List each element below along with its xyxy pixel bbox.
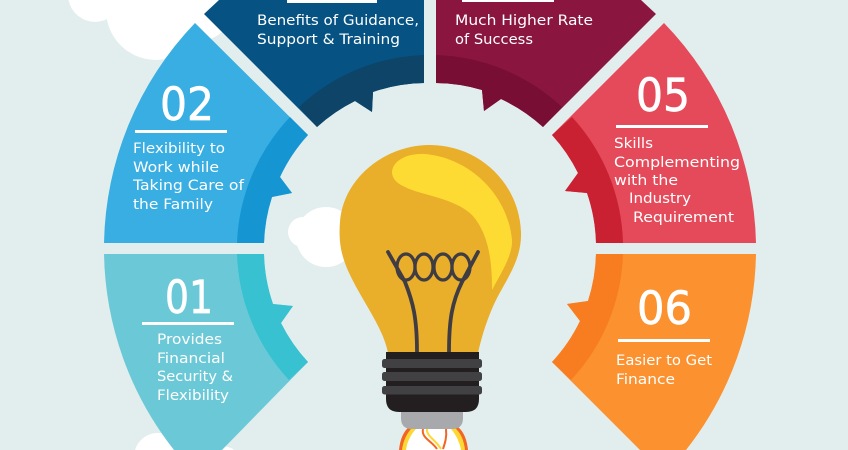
rule: 03 [287, 0, 377, 3]
icon: light bulb [340, 145, 521, 450]
band: 06 inner [552, 254, 623, 380]
panel: 06 easier finance [552, 254, 756, 450]
text: 05 description: Complementing [614, 155, 740, 171]
text: 05 description: with the [614, 173, 678, 189]
text: 06 description: Finance [616, 372, 675, 388]
bulb glass [340, 145, 521, 353]
text: 02 description: Work while [133, 160, 219, 176]
panel: 01 financial security [104, 254, 308, 450]
number: 05: 05 [636, 69, 690, 122]
text: 03 description: Benefits of Guidance, [257, 13, 419, 29]
band: 03 inner [299, 55, 424, 127]
text: 02 description: the Family [133, 197, 213, 213]
text: 01 description: Flexibility [157, 388, 229, 404]
rule: 05 [616, 125, 708, 128]
text: 03 description: Support & Training [257, 32, 400, 48]
number: 02: 02 [160, 78, 214, 131]
panel: 02 flexibility [104, 23, 308, 243]
rule: 06 [618, 339, 710, 342]
text: 01 description: Financial [157, 351, 225, 367]
number: 01: 01 [165, 271, 213, 324]
band: 01 inner [237, 254, 308, 380]
text: 05 description [614, 136, 740, 226]
band: 02 inner [237, 117, 308, 243]
text: 01 description [157, 332, 233, 404]
bulb filament [388, 252, 478, 352]
panel: 03 guidance [204, 0, 424, 127]
cloud: behind bulb [288, 207, 356, 267]
number: 06: 06 [637, 282, 692, 335]
rule: 02 [135, 130, 227, 133]
text: 04 description: of Success [455, 32, 533, 48]
text: 05 description: Requirement [633, 210, 735, 226]
bulb highlight [392, 154, 512, 290]
band: 04 inner [436, 55, 562, 127]
text: 02 description: Taking Care of [132, 178, 245, 194]
text: 04 description [455, 13, 593, 48]
text: 03 description [257, 13, 419, 48]
text: 06 description [616, 353, 713, 388]
text: 04 description: Much Higher Rate [455, 13, 593, 29]
text: 01 description: Security & [157, 369, 233, 385]
bulb screw base [386, 352, 479, 412]
bulb cap [401, 408, 463, 429]
panel: 04 success rate [436, 0, 656, 127]
band: 05 inner [552, 117, 623, 243]
cloud: top left [68, 0, 237, 60]
text: 05 description: Skills [614, 136, 653, 152]
panel: 05 industry skills [552, 23, 756, 243]
bulb flame [399, 427, 468, 450]
text: 02 description [132, 141, 245, 213]
bulb threads [382, 359, 482, 394]
text: 06 description: Easier to Get [616, 353, 713, 369]
text: 02 description: Flexibility to [133, 141, 225, 157]
rule: 04 [462, 0, 554, 2]
text: 01 description: Provides [157, 332, 222, 348]
text: 05 description: Industry [629, 191, 691, 207]
cloud: bottom left [135, 433, 234, 450]
rule: 01 [142, 322, 234, 325]
